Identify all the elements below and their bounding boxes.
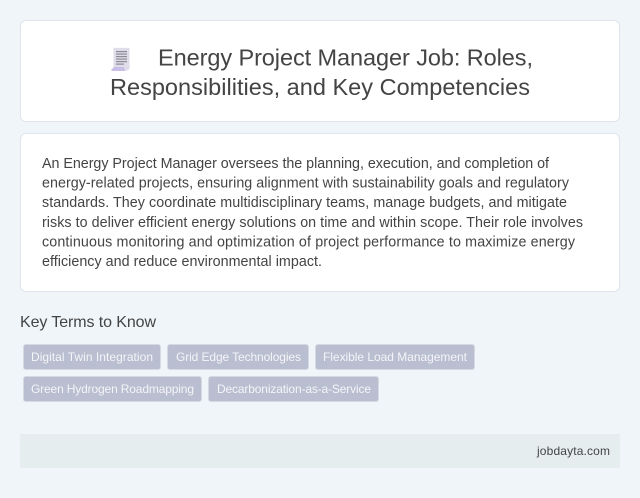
tag: [24, 376, 202, 402]
text block: description: continuous monitoring and optimization of project performance to maximize energy: [42, 234, 576, 250]
heading: key terms: Key Terms to Know: [20, 314, 156, 331]
tags: key terms: [23, 344, 475, 402]
text block: description: energy-related projects, ensuring alignment with sustainability goals and regulatory: [42, 176, 570, 192]
tag: [208, 376, 378, 402]
text block: description: An Energy Project Manager oversees the planning, execution, and completion of: [42, 156, 549, 172]
tag: [24, 344, 160, 370]
tag: [168, 344, 308, 370]
title: Energy Project Manager Job: Roles,: [158, 44, 533, 70]
panel: title card: [20, 20, 620, 122]
title: Responsibilities, and Key Competencies: [110, 74, 530, 100]
icon: document scroll: [111, 48, 130, 71]
text block: description: [42, 156, 583, 270]
title: [110, 44, 533, 100]
footer: [20, 434, 620, 468]
tag: Digital Twin Integration: [31, 350, 153, 364]
tag: [316, 344, 474, 370]
tag: Decarbonization-as-a-Service: [217, 382, 371, 396]
tag: Flexible Load Management: [323, 350, 468, 364]
footer source: jobdayta.com: [536, 444, 610, 458]
text block: description: risks to deliver efficient energy solutions on time and within scope. Their role involves: [42, 215, 583, 231]
tag: Grid Edge Technologies: [176, 350, 301, 364]
panel: description: [20, 133, 620, 292]
tag: Green Hydrogen Roadmapping: [31, 382, 194, 396]
text block: description: standards. They coordinate multidisciplinary teams, manage budgets, and mitigate: [42, 195, 567, 211]
text block: description: efficiency and reduce environmental impact.: [42, 254, 322, 270]
